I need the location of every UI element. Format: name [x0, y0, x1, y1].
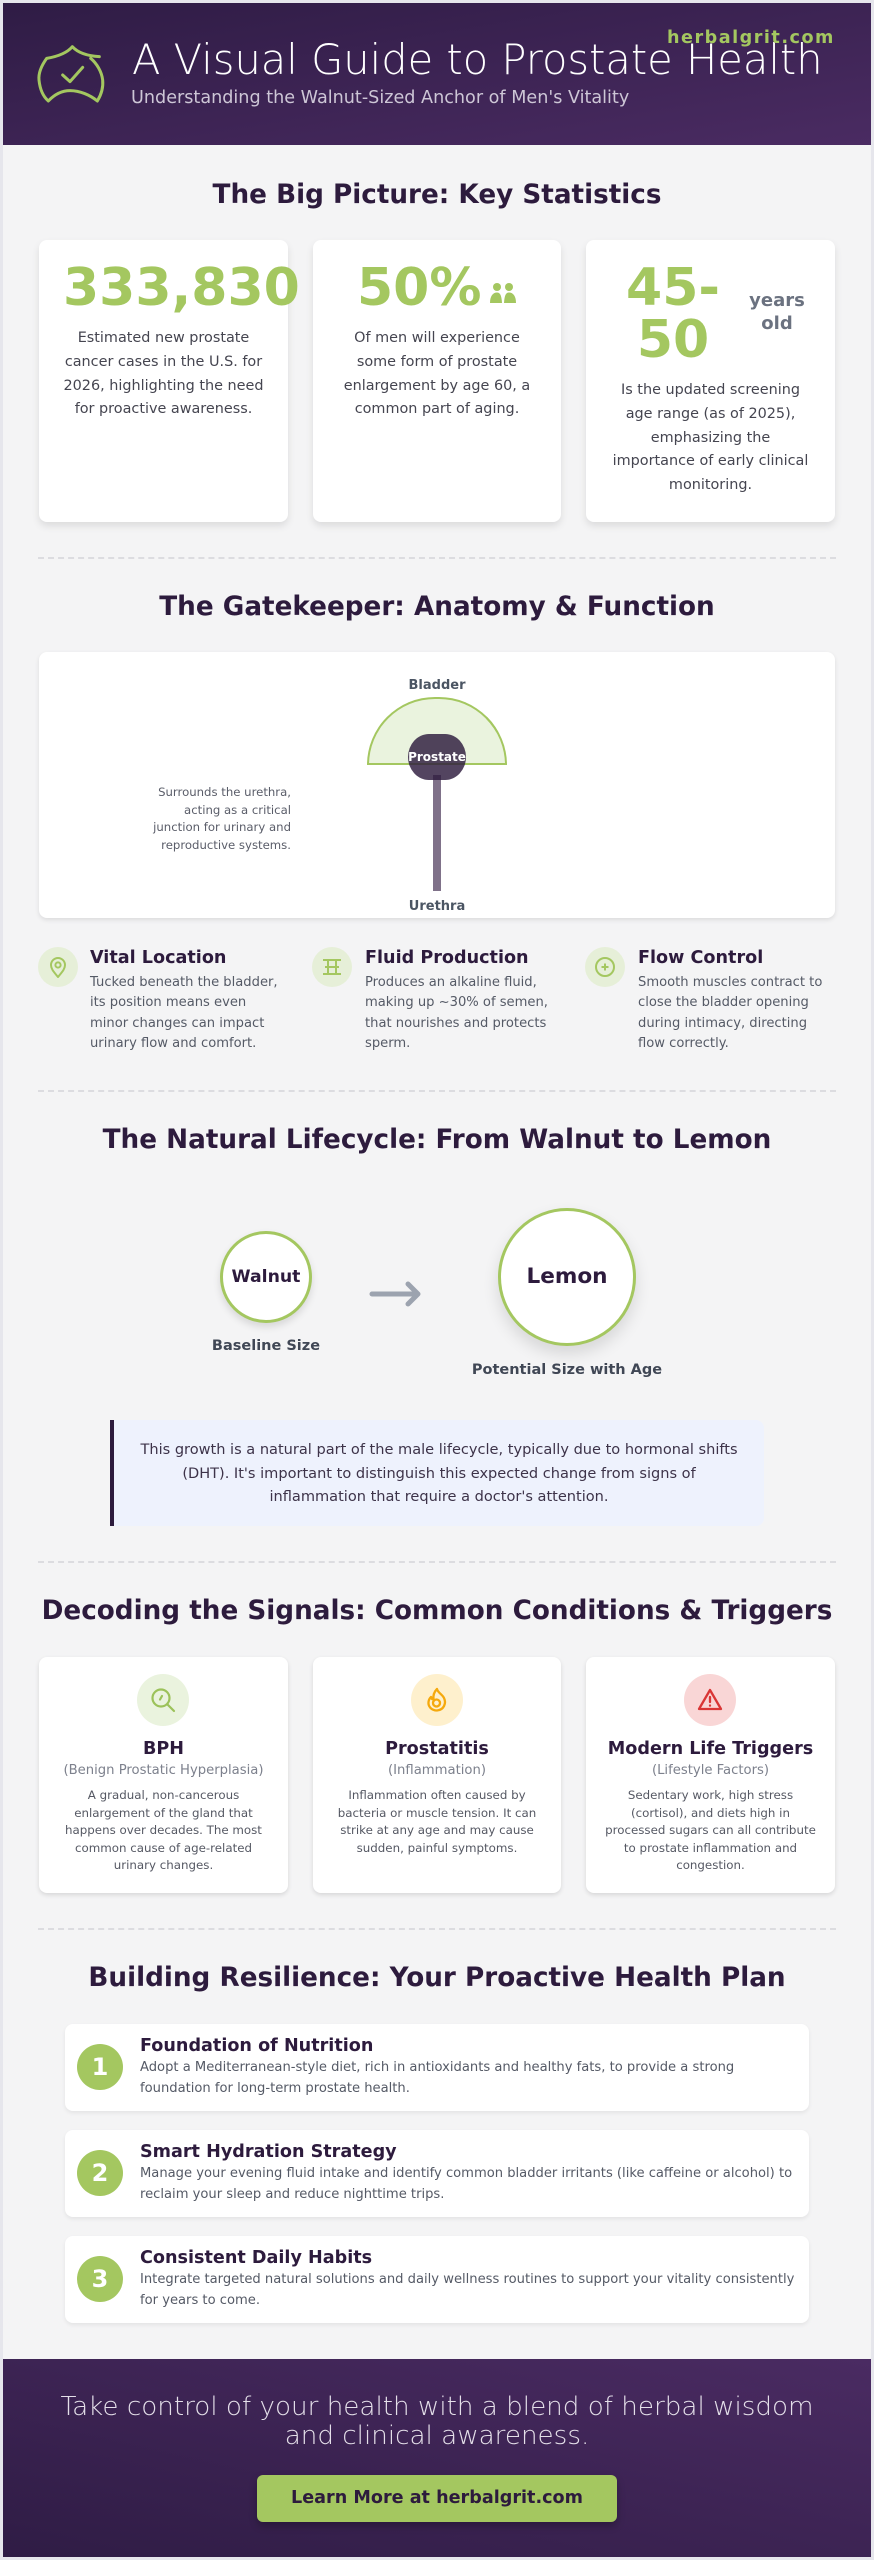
step 1 [65, 2024, 809, 2111]
feature title: Vital Location [90, 948, 226, 968]
condition text: urinary changes. [114, 1858, 213, 1872]
label: bladder: Bladder [408, 678, 465, 693]
lemon size comparison [472, 1208, 662, 1378]
icon: magnifier [137, 1674, 189, 1726]
feature text: minor changes can impact [90, 1016, 264, 1031]
stat number: 50 [637, 310, 709, 370]
icon: fluid layers [312, 947, 352, 987]
feature title: Fluid Production [365, 948, 529, 968]
heading: health plan: Building Resilience: Your Proactive Health Plan [88, 1963, 786, 1993]
feature text [638, 975, 822, 1051]
brand name: herbalgrit.com [667, 28, 835, 48]
callout: natural growth note [110, 1420, 764, 1526]
callout: natural growth note: inflammation that require a doctor's attention. [269, 1488, 609, 1505]
condition text: enlargement of the gland that [74, 1806, 253, 1820]
step text [140, 2060, 734, 2096]
condition text: Inflammation often caused by [348, 1788, 526, 1802]
stat card: screening age [586, 240, 835, 522]
feature text: making up ~30% of semen, [365, 995, 548, 1010]
condition text: strike at any age and may cause [340, 1823, 534, 1837]
step 2 [65, 2130, 809, 2217]
step text: Integrate targeted natural solutions and daily wellness routines to support your vitality consistently [140, 2272, 794, 2287]
step title: Foundation of Nutrition [140, 2036, 373, 2056]
condition text [65, 1788, 262, 1872]
closing message [60, 2392, 814, 2451]
condition text: Sedentary work, high stress [628, 1788, 793, 1802]
title: A Visual Guide to Prostate Health [132, 35, 823, 84]
feature: fluid production [312, 947, 548, 1051]
stat number [626, 258, 720, 370]
stat description: for proactive awareness. [75, 401, 252, 417]
feature text [90, 975, 278, 1051]
step title: Smart Hydration Strategy [140, 2142, 397, 2162]
condition title: BPH [143, 1739, 184, 1759]
condition subtitle: (Inflammation) [388, 1763, 486, 1778]
feature text: Smooth muscles contract to [638, 975, 822, 990]
feature: vital location [38, 947, 278, 1051]
step title: Consistent Daily Habits [140, 2248, 372, 2268]
anatomy description: acting as a critical [184, 802, 291, 816]
header banner [3, 3, 871, 145]
label: baseline size: Baseline Size [212, 1338, 320, 1354]
stat description: enlargement by age 60, a [344, 378, 530, 394]
condition text: (cortisol), and diets high in [631, 1806, 790, 1820]
feature text: that nourishes and protects [365, 1016, 546, 1031]
stat description: age range (as of 2025), [626, 406, 795, 422]
feature text: Tucked beneath the bladder, [90, 975, 278, 990]
label: urethra: Urethra [409, 899, 465, 914]
number badge: 2 [92, 2159, 108, 2187]
stat description: some form of prostate [357, 354, 517, 370]
step 3 [65, 2236, 809, 2323]
condition text: bacteria or muscle tension. It can [338, 1806, 536, 1820]
stat card: new cases [39, 240, 288, 522]
number badge: 3 [92, 2265, 108, 2293]
stat number: 45- [626, 258, 720, 318]
stat description: 2026, highlighting the need [63, 378, 264, 394]
circle: walnut: Walnut [232, 1267, 300, 1287]
callout: natural growth note: This growth is a natural part of the male lifecycle, typically due to hormonal shifts [140, 1441, 738, 1458]
heading: conditions: Decoding the Signals: Common Conditions & Triggers [42, 1596, 832, 1626]
anatomy description: reproductive systems. [161, 838, 291, 852]
stat description [344, 330, 530, 417]
stat number: 50% [357, 258, 481, 318]
icon: flame [411, 1674, 463, 1726]
step text: Adopt a Mediterranean-style diet, rich in antioxidants and healthy fats, to provide a strong [140, 2060, 734, 2075]
stat description: Is the updated screening [621, 382, 800, 398]
condition text: common cause of age-related [75, 1840, 252, 1854]
feature text: flow correctly. [638, 1036, 729, 1051]
feature text: urinary flow and comfort. [90, 1036, 256, 1051]
subtitle: Understanding the Walnut-Sized Anchor of Men's Vitality [131, 88, 629, 108]
condition title: Modern Life Triggers [608, 1739, 813, 1759]
shape: prostate: Prostate [408, 750, 466, 764]
arrow [370, 1282, 420, 1306]
footer banner [3, 2359, 871, 2557]
feature text: close the bladder opening [638, 995, 809, 1010]
anatomy description: junction for urinary and [153, 820, 291, 834]
stat description: cancer cases in the U.S. for [65, 354, 262, 370]
icon: shield with check [37, 45, 104, 103]
feature text [365, 975, 548, 1051]
condition text [605, 1788, 816, 1872]
condition text [338, 1788, 536, 1854]
feature text: during intimacy, directing [638, 1016, 807, 1031]
circle: walnut [220, 1231, 312, 1323]
stat unit: years [749, 290, 805, 311]
step text [140, 2166, 792, 2202]
label: potential size: Potential Size with Age [472, 1362, 662, 1378]
heading: lifecycle: The Natural Lifecycle: From Walnut to Lemon [103, 1125, 771, 1155]
feature: flow control [585, 947, 822, 1051]
stat description: monitoring. [669, 477, 752, 493]
step text [140, 2272, 794, 2308]
number badge [77, 2256, 123, 2302]
condition card: BPH [39, 1657, 288, 1893]
condition text: sudden, painful symptoms. [357, 1840, 517, 1854]
stat description: Estimated new prostate [78, 330, 249, 346]
feature text: Produces an alkaline fluid, [365, 975, 537, 990]
callout: natural growth note: (DHT). It's important to distinguish this expected change from signs of [182, 1465, 696, 1482]
anatomy description [152, 785, 291, 852]
number badge [77, 2150, 123, 2196]
stat description: emphasizing the [651, 430, 770, 446]
panel: anatomy diagram [39, 652, 835, 918]
condition text: to prostate inflammation and [624, 1840, 797, 1854]
stat unit [749, 290, 805, 334]
stat card: enlargement [313, 240, 561, 522]
condition subtitle: (Lifestyle Factors) [652, 1763, 769, 1778]
circle: lemon: Lemon [526, 1264, 608, 1289]
icon: plus circle [585, 947, 625, 987]
stat description: importance of early clinical [613, 453, 808, 469]
stat description [613, 382, 808, 493]
condition text: congestion. [676, 1858, 745, 1872]
condition title: Prostatitis [385, 1739, 489, 1759]
feature title: Flow Control [638, 948, 763, 968]
heading: key statistics: The Big Picture: Key Statistics [213, 180, 661, 210]
stat unit: old [761, 313, 793, 334]
step text: foundation for long-term prostate health. [140, 2081, 410, 2096]
shape: prostate [408, 734, 466, 780]
closing message: and clinical awareness. [285, 2421, 589, 2451]
condition text: happens over decades. The most [65, 1823, 262, 1837]
heading: anatomy: The Gatekeeper: Anatomy & Function [159, 592, 715, 622]
anatomy description: Surrounds the urethra, [158, 785, 291, 799]
closing message: Take control of your health with a blend of herbal wisdom [60, 2392, 814, 2422]
feature text: its position means even [90, 995, 246, 1010]
number badge [77, 2044, 123, 2090]
icon: map pin [38, 947, 78, 987]
condition text: A gradual, non-cancerous [88, 1788, 239, 1802]
stat description: Of men will experience [354, 330, 520, 346]
button: learn more: Learn More at herbalgrit.com [291, 2488, 583, 2508]
condition card: modern life triggers [586, 1657, 835, 1893]
shape: bladder [367, 697, 507, 765]
condition subtitle: (Benign Prostatic Hyperplasia) [63, 1763, 264, 1778]
shape: urethra [433, 775, 441, 891]
walnut size comparison [212, 1231, 320, 1354]
icon: warning triangle [684, 1674, 736, 1726]
feature text: sperm. [365, 1036, 410, 1051]
circle: lemon [498, 1208, 636, 1346]
step text: for years to come. [140, 2293, 260, 2308]
stat description: common part of aging. [355, 401, 519, 417]
button: learn more [257, 2475, 617, 2522]
number badge: 1 [92, 2053, 108, 2081]
stat number: 333,830 [63, 258, 300, 318]
stat description [63, 330, 264, 417]
condition card: prostatitis [313, 1657, 561, 1893]
condition text: processed sugars can all contribute [605, 1823, 816, 1837]
step text: reclaim your sleep and reduce nighttime trips. [140, 2187, 444, 2202]
step text: Manage your evening fluid intake and identify common bladder irritants (like caffeine or alcohol) to [140, 2166, 792, 2181]
icon: people [490, 283, 516, 303]
